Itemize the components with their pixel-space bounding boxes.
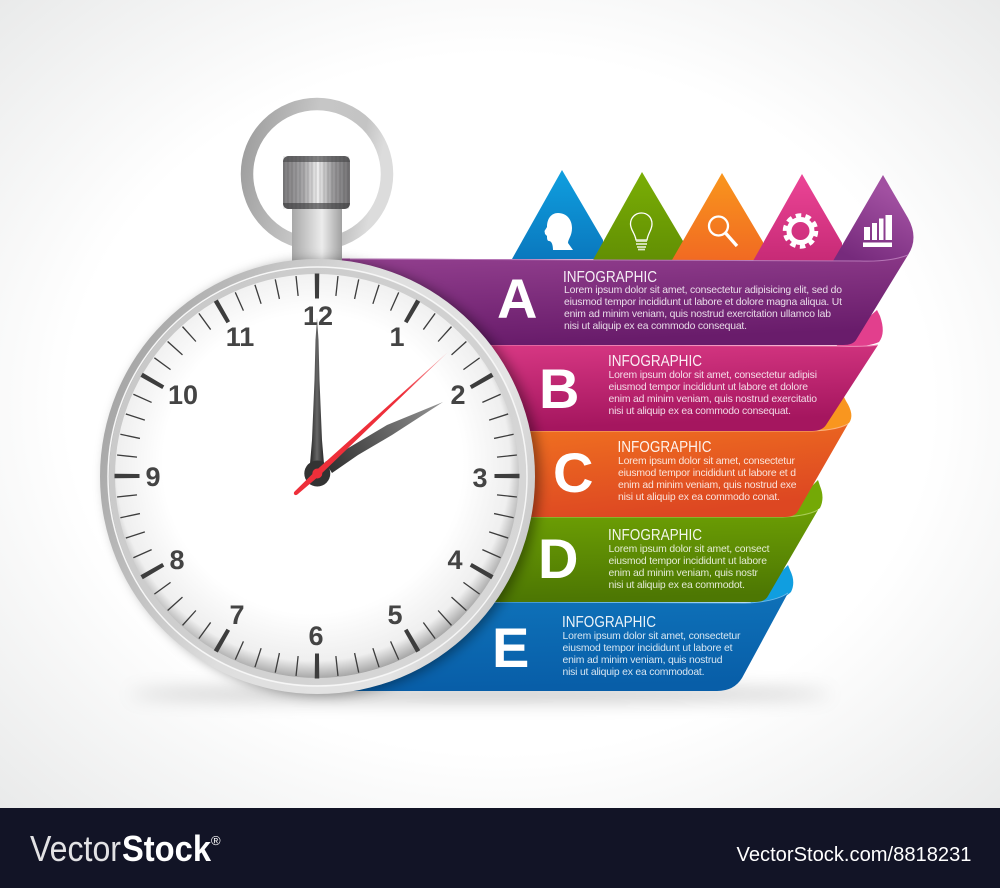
image id: VectorStock.com/8818231: [736, 844, 972, 866]
clock shadow: [106, 261, 540, 695]
text block B: enim ad minim veniam, quis nostrud exercitatio: [608, 394, 817, 405]
clock numbers: 1: [389, 322, 405, 352]
clock numbers: 2: [450, 380, 466, 410]
text block E: eiusmod tempor incididunt ut labore et: [562, 643, 733, 654]
logo: Vector: [30, 828, 121, 869]
ribbon tail: purple with chart icon: [833, 175, 914, 261]
text block A: INFOGRAPHIC: [563, 269, 657, 286]
panel: icon tabs: [512, 170, 842, 261]
letter E: E: [492, 616, 529, 679]
ribbon D: [330, 510, 818, 602]
logo: ®: [211, 833, 221, 848]
ribbon tail: orange: [805, 395, 851, 432]
ribbon E: [330, 593, 788, 691]
bezel: [100, 259, 535, 694]
text block E: nisi ut aliquip ex ea commodoat.: [562, 667, 704, 678]
text block C: enim ad minim veniam, quis nostrud exe: [618, 480, 797, 491]
text block D: enim ad minim veniam, quis nostr: [608, 568, 759, 579]
hour hand: [325, 402, 443, 473]
hour ticks: [127, 286, 507, 666]
clock numbers: 11: [226, 322, 254, 352]
second hand: [294, 352, 448, 495]
ribbon A: [330, 255, 908, 345]
clock numbers: 6: [308, 621, 324, 651]
clock numbers: 8: [169, 545, 185, 575]
text block A: enim ad minim veniam, quis nostrud exercitation ullamco lab: [564, 309, 831, 320]
icon: magnifier: [709, 216, 737, 246]
text block C: nisi ut aliquip ex ea commodo conat.: [618, 492, 780, 503]
clock numbers: 4: [447, 545, 463, 575]
text block B: eiusmod tempor incididunt ut labore et dolore: [608, 382, 808, 393]
text block B: Lorem ipsum dolor sit amet, consectetur adipisi: [608, 370, 817, 381]
ring: [248, 104, 386, 244]
ribbon tail: pink: [835, 310, 883, 347]
hub: [304, 460, 330, 486]
text block A: eiusmod tempor incididunt ut labore et dolore magna aliqua. Ut: [564, 297, 842, 308]
clock numbers: 7: [229, 600, 245, 630]
text block E: INFOGRAPHIC: [562, 614, 656, 631]
ribbon tail: blue: [750, 565, 793, 603]
text block E: [562, 614, 741, 678]
ribbon C: [330, 424, 848, 517]
clock numbers: 9: [145, 462, 161, 492]
tab: person: [512, 170, 603, 259]
hub cap: [312, 468, 322, 478]
text block D: INFOGRAPHIC: [608, 527, 702, 544]
clock face: [115, 274, 519, 678]
text block C: INFOGRAPHIC: [618, 439, 712, 456]
icon: gear: [785, 216, 816, 246]
clock numbers: [145, 301, 488, 651]
text block A: [563, 269, 842, 332]
minute hand: [310, 318, 324, 470]
stopwatch: [100, 104, 540, 695]
ribbon tail: green: [780, 480, 822, 518]
tab: search: [672, 173, 763, 260]
logo: Stock: [122, 828, 212, 869]
stem: [292, 205, 342, 263]
letter B: B: [539, 357, 579, 420]
text block C: eiusmod tempor incididunt ut labore et d: [618, 468, 796, 479]
text block B: [608, 353, 817, 417]
letter A: A: [497, 267, 537, 330]
text block B: INFOGRAPHIC: [608, 353, 702, 370]
text block D: [608, 527, 770, 591]
footer: [0, 808, 1000, 888]
icon: head: [544, 213, 573, 250]
clock numbers: 10: [168, 380, 198, 410]
text block C: [618, 439, 797, 503]
text block E: Lorem ipsum dolor sit amet, consectetur: [562, 631, 741, 642]
icon: bulb: [630, 213, 652, 250]
knob: [283, 156, 350, 209]
text block D: nisi ut aliquip ex ea commodot.: [608, 580, 745, 591]
logo: [30, 828, 221, 869]
text block C: Lorem ipsum dolor sit amet, consectetur: [618, 456, 796, 467]
text block D: Lorem ipsum dolor sit amet, consect: [608, 544, 770, 555]
text block D: eiusmod tempor incididunt ut labore: [608, 556, 767, 567]
ground shadow: [130, 688, 830, 700]
minute ticks: [126, 285, 508, 667]
clock numbers: 5: [387, 600, 403, 630]
text block B: nisi ut aliquip ex ea commodo consequat.: [608, 406, 791, 417]
text block E: enim ad minim veniam, quis nostrud: [562, 655, 723, 666]
letter D: D: [538, 527, 578, 590]
tab: settings: [753, 174, 842, 261]
tab: idea: [593, 172, 683, 260]
text block A: Lorem ipsum dolor sit amet, consectetur adipisicing elit, sed do: [564, 285, 842, 296]
icon: bar chart: [863, 215, 892, 247]
clock numbers: 12: [303, 301, 333, 331]
ribbon B: [330, 345, 878, 431]
text block A: nisi ut aliquip ex ea commodo consequat.: [564, 321, 747, 332]
letter C: C: [553, 441, 593, 504]
clock numbers: 3: [472, 463, 488, 493]
